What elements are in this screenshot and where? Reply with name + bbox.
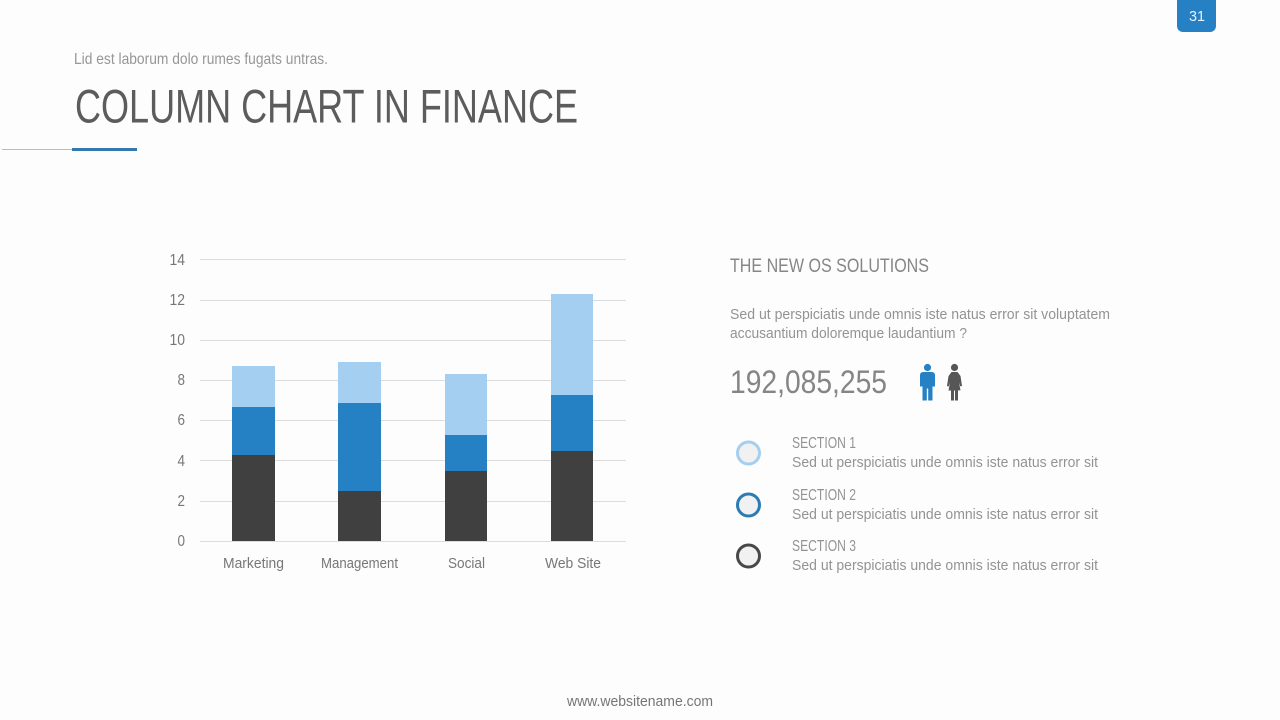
stacked column chart [170,252,626,572]
legend: section 1: Sed ut perspiciatis unde omnis iste natus error sit [792,454,1099,471]
page number badge: 31 [1189,8,1205,25]
bar: Management [338,362,381,541]
subtitle: Lid est laborum dolo rumes fugats untras. [74,51,328,68]
legend: section 3: SECTION 3 [792,538,856,555]
legend: section 2 [738,487,1099,523]
legend: section 2: SECTION 2 [792,487,856,504]
legend: section 3 [738,538,1099,574]
description text [730,306,1110,342]
title underline [2,148,137,151]
icon: woman [947,364,962,400]
bar: Social [445,374,487,541]
y axis labels: 14 [170,252,185,269]
icon: man [920,364,935,400]
x axis labels: Web Site [545,555,601,572]
page number badge [1177,0,1216,32]
y axis labels: 12 [170,292,185,309]
legend: section 3: Sed ut perspiciatis unde omnis iste natus error sit [792,557,1099,574]
bar: Marketing [232,366,275,541]
bar: Web Site [551,294,593,541]
legend: section 1: SECTION 1 [792,435,856,452]
y axis labels [170,252,185,550]
legend: section 1 [738,435,1099,471]
footer website: www.websitename.com [566,693,713,710]
y axis labels: 8 [178,372,185,389]
heading: the new OS solutions: THE NEW OS SOLUTIONS [730,255,929,277]
population number: 192,085,255 [730,364,887,400]
legend: section 2: Sed ut perspiciatis unde omnis iste natus error sit [792,506,1099,523]
x axis labels [223,555,601,572]
y axis labels: 2 [178,493,185,510]
x axis labels: Management [321,555,399,572]
y axis labels: 4 [178,453,185,470]
x axis labels: Marketing [223,555,284,572]
y axis labels: 6 [178,412,185,429]
y axis labels: 10 [170,332,185,349]
x axis labels: Social [448,555,485,572]
description text: Sed ut perspiciatis unde omnis iste natus error sit voluptatem [730,306,1110,323]
title: COLUMN CHART IN FINANCE [75,80,578,132]
description text: accusantium doloremque laudantium ? [730,325,967,342]
y axis labels: 0 [178,533,185,550]
